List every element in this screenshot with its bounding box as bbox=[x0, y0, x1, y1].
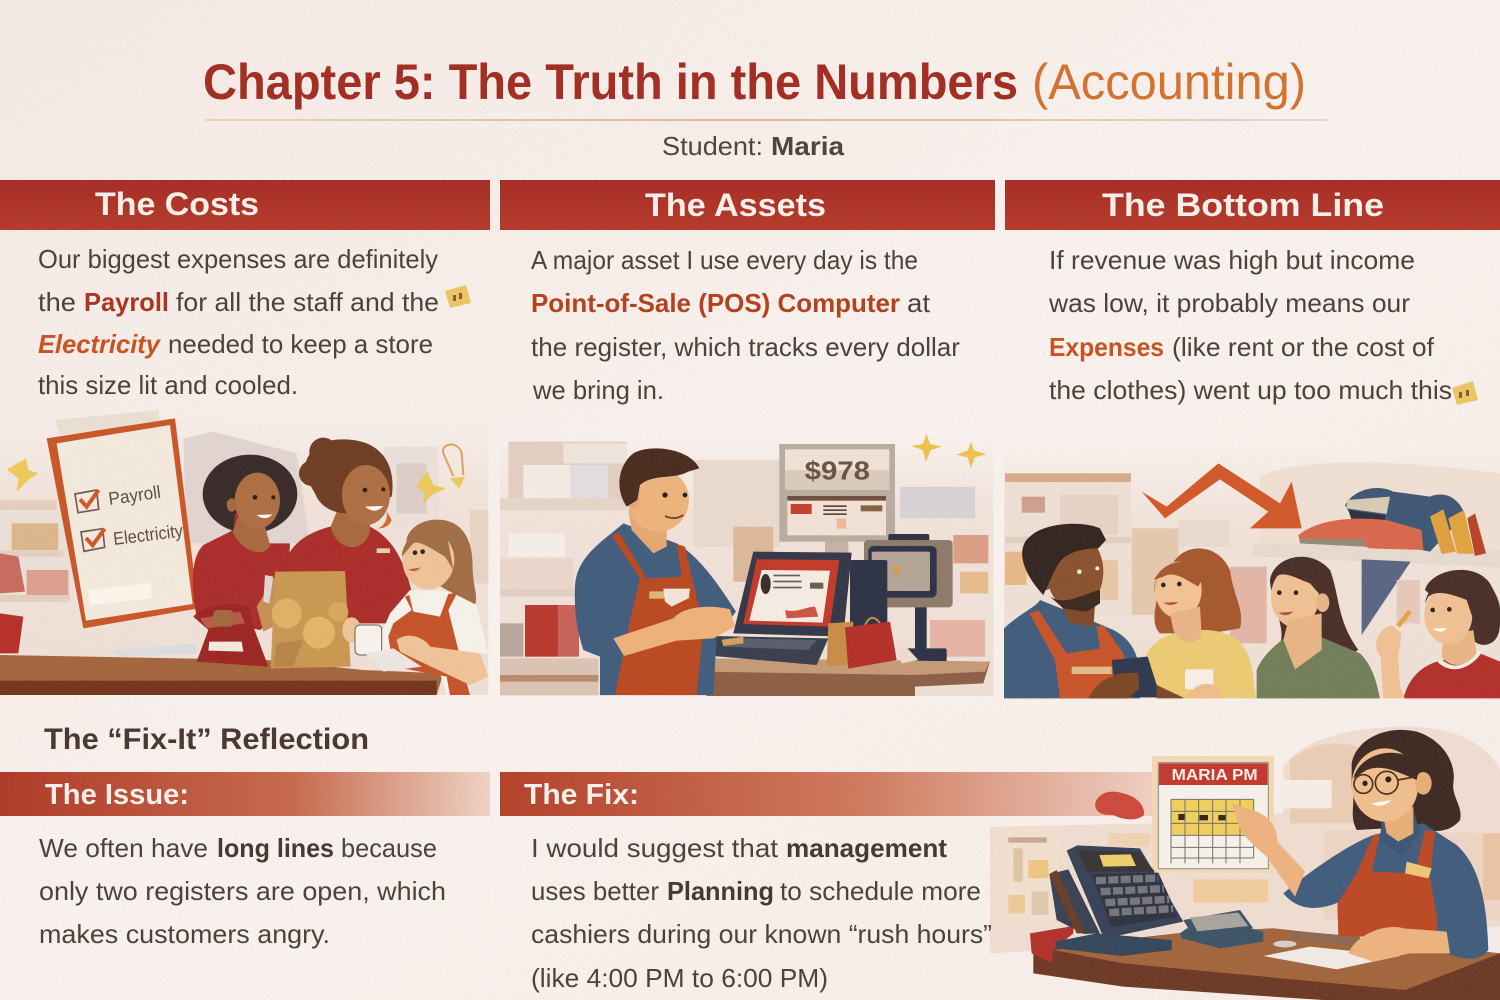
title: (Accounting) bbox=[1032, 54, 1306, 110]
red purse bbox=[193, 604, 268, 667]
person: man with tablet bbox=[1004, 524, 1185, 698]
text block: costs: for all the staff and the bbox=[176, 287, 439, 317]
illustration: cashier at POS bbox=[500, 434, 993, 696]
text block: bottom line: If revenue was high but income bbox=[1049, 245, 1415, 275]
person: girl in apron bbox=[342, 520, 488, 695]
text block: bottom line bbox=[1048, 245, 1452, 405]
text block: issue: only two registers are open, which bbox=[39, 876, 446, 906]
text block: assets bbox=[531, 245, 960, 405]
icon: small note bbox=[445, 285, 471, 308]
person: woman with curly hair bbox=[193, 455, 297, 630]
POS terminal bbox=[1030, 845, 1263, 963]
heading: the assets: The Assets bbox=[645, 187, 826, 223]
heading: the fix: The Fix: bbox=[524, 779, 639, 811]
icon: stars bbox=[7, 445, 465, 503]
wooden desk bbox=[1033, 928, 1500, 1000]
text block: fix: cashiers during our known “rush hours” bbox=[531, 919, 992, 949]
heading: the fix bbox=[500, 772, 1155, 816]
text block: fix: uses better bbox=[531, 876, 659, 906]
illustration: manager with schedule bbox=[990, 727, 1500, 1000]
person: woman with tied-up hair bbox=[277, 438, 412, 623]
panel: the bottom line bbox=[1004, 180, 1500, 698]
icon: small note bbox=[1452, 381, 1478, 405]
wooden counter bbox=[0, 655, 443, 695]
title: Chapter 5: The Truth in the Numbers bbox=[203, 54, 1018, 110]
calendar: maria pm bbox=[1152, 756, 1274, 873]
arrow: falling trend bbox=[1142, 463, 1302, 528]
student line: Maria bbox=[771, 131, 845, 161]
panel: the costs bbox=[0, 180, 490, 695]
text block: assets: at bbox=[907, 288, 931, 318]
computer tower bbox=[850, 560, 887, 627]
heading: the costs: The Costs bbox=[95, 186, 259, 222]
price display: $978 bbox=[805, 455, 870, 485]
text block: costs: the bbox=[38, 287, 76, 317]
customer screen bbox=[864, 534, 953, 662]
text block: costs: Our biggest expenses are definitely bbox=[38, 244, 438, 274]
heading: the bottom line: The Bottom Line bbox=[1102, 187, 1384, 223]
illustration: team with falling arrow bbox=[1004, 447, 1500, 698]
panel: the issue bbox=[0, 772, 490, 949]
checklist bbox=[47, 410, 198, 628]
text block: bottom line: was low, it probably means our bbox=[1048, 288, 1410, 318]
calendar: maria pm: MARIA PM bbox=[1172, 767, 1258, 784]
student line bbox=[662, 131, 845, 161]
text block: costs bbox=[38, 244, 439, 400]
text block: costs: this size lit and cooled. bbox=[38, 370, 298, 400]
text block: issue: because bbox=[341, 833, 437, 863]
person: cashier bbox=[575, 448, 736, 695]
text block: assets: we bring in. bbox=[532, 375, 664, 405]
text block: issue: long lines bbox=[217, 833, 334, 863]
illustration: staff with checklist bbox=[0, 410, 488, 695]
paper bag bbox=[257, 571, 351, 668]
text block: fix: to schedule more bbox=[780, 876, 981, 906]
heading: the assets bbox=[500, 180, 995, 230]
text block: assets: the register, which tracks every dollar bbox=[531, 332, 960, 362]
panel: the assets bbox=[500, 180, 995, 696]
student line: Student: bbox=[662, 131, 763, 161]
text block: costs: Electricity bbox=[38, 329, 162, 359]
heading: the issue: The Issue: bbox=[45, 779, 189, 811]
icon: sparkles bbox=[911, 434, 987, 468]
clothes on shelf bbox=[1298, 488, 1486, 556]
red blot bbox=[1095, 792, 1144, 819]
person: woman in yellow bbox=[1147, 548, 1256, 698]
text block: assets: A major asset I use every day is the bbox=[531, 245, 918, 275]
person: manager bbox=[1232, 730, 1488, 962]
text block: bottom line: Expenses bbox=[1049, 332, 1164, 362]
section heading: fix-it reflection: The “Fix-It” Reflection bbox=[44, 723, 369, 756]
heading: the bottom line bbox=[1005, 180, 1500, 230]
person: woman in green bbox=[1257, 557, 1380, 698]
text block: issue bbox=[39, 833, 446, 949]
text block: bottom line: (like rent or the cost of bbox=[1172, 332, 1435, 362]
shopping bags bbox=[827, 618, 918, 669]
price display bbox=[779, 444, 895, 553]
text block: assets: Point-of-Sale (POS) Computer bbox=[531, 288, 900, 318]
POS computer bbox=[702, 552, 852, 665]
text block: costs: needed to keep a store bbox=[168, 329, 433, 359]
text block: issue: makes customers angry. bbox=[39, 919, 330, 949]
heading: the costs bbox=[0, 180, 490, 230]
text block: fix: (like 4:00 PM to 6:00 PM) bbox=[531, 963, 828, 993]
POS counter bbox=[688, 658, 990, 696]
heading: the issue bbox=[0, 772, 490, 816]
person: woman in red with pencil bbox=[1376, 570, 1500, 698]
text block: costs: Payroll bbox=[84, 287, 169, 317]
checklist: Electricity bbox=[112, 521, 184, 549]
text block: bottom line: the clothes) went up too much this bbox=[1049, 375, 1452, 405]
text block: fix bbox=[531, 833, 992, 993]
text block: fix: I would suggest that bbox=[531, 833, 779, 863]
checklist: Payroll bbox=[107, 482, 162, 509]
text block: fix: management bbox=[786, 833, 947, 863]
text block: issue: We often have bbox=[39, 833, 208, 863]
text block: fix: Planning bbox=[667, 876, 774, 906]
